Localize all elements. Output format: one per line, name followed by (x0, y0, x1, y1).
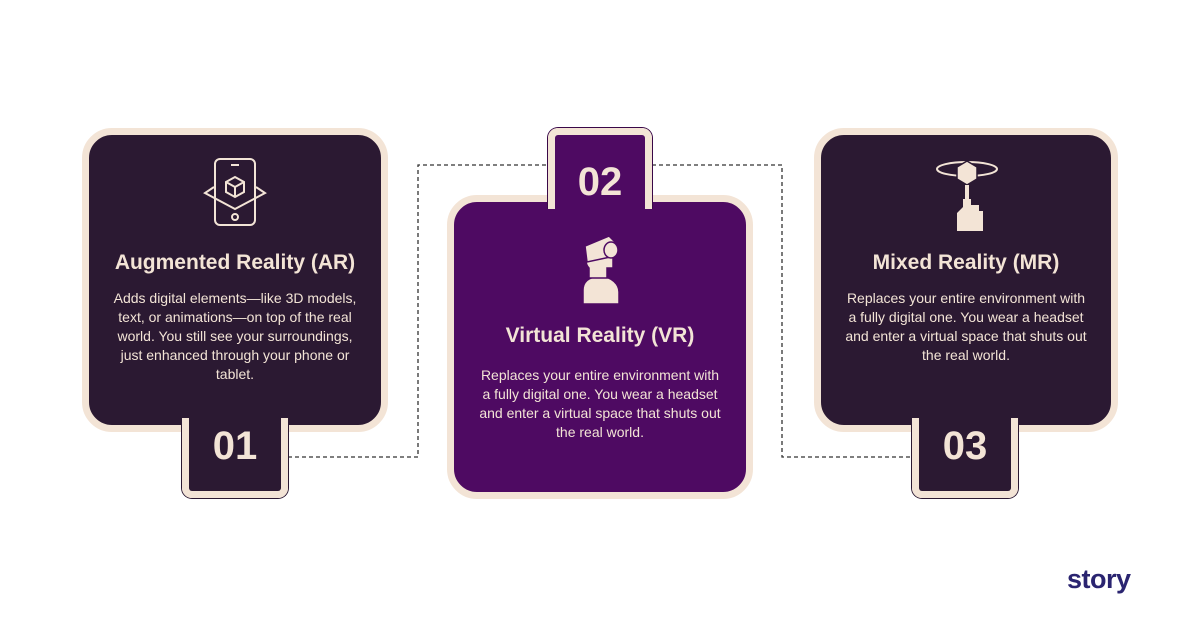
panel: AR (82, 128, 388, 432)
logo: story: story (1067, 564, 1131, 594)
text: text, or animations—on top of the real (118, 309, 352, 325)
text: and enter a virtual space that shuts out (845, 328, 1087, 344)
text: a fully digital one. You wear a headset (848, 309, 1084, 325)
panel: VR (447, 195, 753, 499)
icon: phone with cube (203, 158, 267, 226)
text (845, 290, 1087, 363)
panel: MR (814, 128, 1118, 432)
text (114, 290, 356, 382)
heading: Augmented Reality (AR) (115, 251, 355, 274)
tab: 01 (181, 418, 289, 499)
text: just enhanced through your phone or (121, 347, 349, 363)
text: the real world. (556, 424, 644, 440)
text: a fully digital one. You wear a headset (482, 386, 718, 402)
tab: 03 (911, 418, 1019, 499)
tab: 02: 02 (578, 160, 622, 204)
text: Replaces your entire environment with (847, 290, 1085, 306)
text: Replaces your entire environment with (481, 367, 719, 383)
tab: 03: 03 (943, 424, 987, 468)
text: Adds digital elements—like 3D models, (114, 290, 356, 306)
text: tablet. (216, 366, 254, 382)
text: the real world. (922, 347, 1010, 363)
text: and enter a virtual space that shuts out (479, 405, 721, 421)
icon: person with VR headset (584, 237, 618, 304)
heading: Mixed Reality (MR) (873, 251, 1059, 274)
icon: hand with rotating cube (936, 161, 998, 231)
tab: 02 (547, 127, 653, 209)
heading: Virtual Reality (VR) (506, 324, 694, 347)
text (479, 367, 721, 440)
text: world. You still see your surroundings, (117, 328, 353, 344)
tab: 01: 01 (213, 424, 257, 468)
